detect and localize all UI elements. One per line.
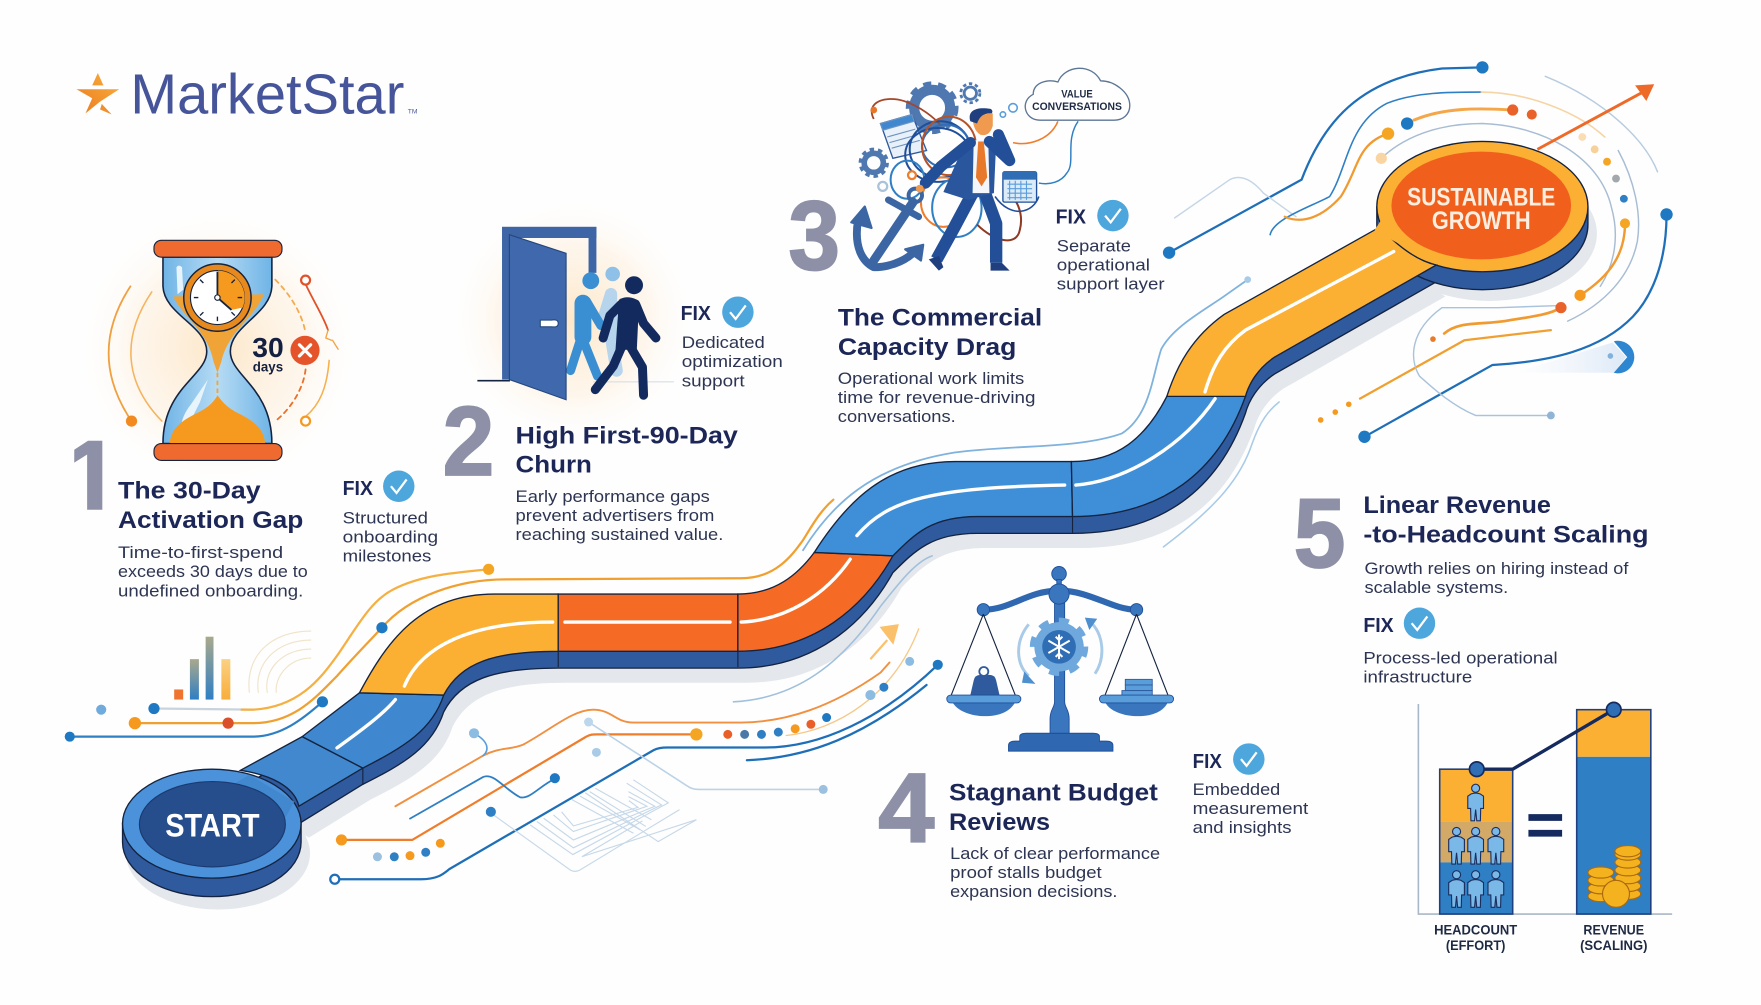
fix 5: FIX bbox=[1363, 614, 1394, 637]
heading 3 bbox=[838, 305, 1042, 361]
body 3: conversations. bbox=[838, 408, 956, 426]
orange segment 2 bbox=[738, 552, 893, 651]
body 1: exceeds 30 days due to bbox=[118, 563, 308, 581]
icon: man with anchor and tangled wires bbox=[851, 84, 1078, 271]
heading 1: Activation Gap bbox=[118, 507, 303, 534]
left pan bbox=[952, 702, 1015, 716]
fix 4: FIX bbox=[1193, 750, 1222, 773]
icon: door and people bbox=[477, 227, 674, 400]
hourglass highlights bbox=[176, 266, 208, 438]
label: 30 days: days bbox=[253, 360, 283, 375]
body 1: Time-to-first-spend bbox=[118, 544, 283, 562]
orange segment 1 bbox=[558, 594, 738, 651]
road: white lane lines bbox=[337, 252, 1394, 748]
heading 1: The 30-Day bbox=[118, 478, 261, 505]
road: disc shadows bbox=[126, 166, 1597, 910]
sustainable growth disc inner: GROWTH bbox=[1432, 208, 1531, 235]
body 1 bbox=[118, 544, 308, 600]
number 1: 1 bbox=[60, 415, 125, 547]
bar labels: (EFFORT) bbox=[1446, 937, 1505, 953]
body 2: Early performance gaps bbox=[516, 488, 710, 506]
chart axes bbox=[1418, 704, 1672, 914]
snowflake bbox=[1048, 634, 1070, 659]
heading 2: Churn bbox=[516, 452, 592, 479]
start disc inner bbox=[139, 782, 285, 867]
blue segment 3 bbox=[1071, 396, 1245, 517]
equals sign bbox=[1528, 814, 1562, 837]
scale beam bbox=[984, 591, 1137, 610]
network lines: bottom centre bbox=[335, 556, 938, 879]
fix 4: measurement bbox=[1193, 800, 1309, 818]
right pan bbox=[1105, 702, 1168, 716]
body 2 bbox=[516, 488, 723, 544]
man hair bbox=[970, 108, 992, 124]
logo wordmark: MarketStar bbox=[130, 62, 404, 125]
body 4: proof stalls budget bbox=[950, 864, 1102, 882]
man shoes bbox=[929, 256, 1010, 271]
body 4: Lack of clear performance bbox=[950, 845, 1160, 863]
man arms bbox=[925, 135, 1010, 183]
value conversations cloud: CONVERSATIONS bbox=[1032, 101, 1122, 113]
glow behind door bbox=[447, 194, 699, 446]
glow behind hourglass bbox=[74, 204, 362, 492]
man shirt and tie bbox=[973, 139, 989, 193]
chart: headcount vs revenue bbox=[1418, 702, 1672, 953]
dots around growth disc bbox=[1163, 61, 1673, 443]
fix 5 bbox=[1363, 607, 1558, 687]
body 2: reaching sustained value. bbox=[516, 526, 723, 544]
icon: balance scale with frozen gear bbox=[947, 567, 1174, 751]
blue person bbox=[571, 272, 601, 376]
body 1: undefined onboarding. bbox=[118, 582, 303, 600]
bottom cap bbox=[154, 444, 282, 460]
fix 2: FIX bbox=[681, 302, 711, 325]
heading 5: -to-Headcount Scaling bbox=[1363, 521, 1649, 548]
fix 1: onboarding bbox=[343, 528, 438, 546]
blue segment 2 bbox=[814, 462, 1073, 556]
document details bbox=[880, 115, 920, 148]
fix 4 bbox=[1193, 743, 1309, 837]
body 4 bbox=[950, 845, 1160, 901]
gears bbox=[860, 84, 980, 191]
heading 2: High First-90-Day bbox=[516, 423, 739, 450]
fix 1: milestones bbox=[343, 547, 431, 565]
network lines: left of road bbox=[65, 500, 833, 742]
fix 3 bbox=[1056, 200, 1165, 294]
logo: MarketStar bbox=[76, 62, 418, 125]
body 2: prevent advertisers from bbox=[516, 507, 714, 525]
icon: hourglass bbox=[154, 240, 282, 460]
heading 3: Capacity Drag bbox=[838, 334, 1016, 361]
fix 2 bbox=[681, 296, 783, 390]
start disc top bbox=[123, 769, 301, 878]
revenue bar bbox=[1577, 710, 1651, 914]
coins bbox=[1588, 846, 1641, 907]
fix 1: Structured bbox=[343, 509, 428, 527]
small bubbles bbox=[1000, 104, 1017, 117]
top cap bbox=[154, 240, 282, 257]
growth label: SUSTAINABLE bbox=[1407, 184, 1555, 211]
fix 2: support bbox=[682, 372, 745, 390]
mini bar chart bbox=[174, 631, 311, 700]
people icons bbox=[1449, 784, 1504, 907]
value conversations cloud bbox=[1025, 68, 1130, 120]
left weight bbox=[970, 675, 1000, 695]
calendar bbox=[1003, 172, 1037, 202]
document bbox=[880, 115, 927, 158]
rotation arrows bbox=[1019, 623, 1102, 676]
fix 2: optimization bbox=[682, 353, 783, 371]
gear bbox=[1033, 620, 1085, 673]
fix 1: FIX bbox=[343, 477, 373, 500]
heading 4 bbox=[949, 780, 1158, 836]
number 5: 5 bbox=[1294, 478, 1345, 588]
scale post bbox=[1050, 595, 1069, 733]
wires bbox=[891, 117, 1078, 240]
man torso bbox=[943, 143, 996, 200]
heading 1 bbox=[118, 478, 303, 534]
fix 3: Separate bbox=[1057, 238, 1131, 256]
arrow: small orange up bbox=[870, 625, 897, 659]
man head bbox=[973, 113, 993, 135]
right pan rim bbox=[1099, 695, 1174, 703]
fix 1 bbox=[343, 470, 438, 565]
network lines: along road top and right bbox=[803, 67, 1667, 550]
trend dots bbox=[1469, 702, 1621, 776]
fix 3: operational bbox=[1057, 257, 1150, 275]
bar labels: HEADCOUNT bbox=[1434, 921, 1518, 937]
start label: START bbox=[165, 808, 260, 844]
icon: red cross bbox=[290, 336, 320, 365]
icon: pacman marker bbox=[1514, 341, 1634, 373]
icon: logo star bbox=[76, 73, 119, 115]
trademark: TM bbox=[408, 108, 418, 115]
door handle bbox=[540, 320, 558, 327]
sustainable growth disc inner bbox=[1391, 152, 1571, 259]
start neck bbox=[240, 737, 363, 806]
trend line bbox=[1477, 710, 1614, 769]
body 3 bbox=[838, 370, 1035, 426]
dots: bottom centre bbox=[330, 657, 943, 884]
heading 5: Linear Revenue bbox=[1363, 492, 1551, 519]
bar labels bbox=[1434, 921, 1647, 953]
hourglass glass bbox=[163, 257, 272, 444]
road: start segments bbox=[123, 141, 1588, 878]
body 5: scalable systems. bbox=[1364, 579, 1508, 597]
heading 4: Reviews bbox=[949, 809, 1050, 836]
right stack bbox=[1122, 679, 1152, 696]
body 5: Growth relies on hiring instead of bbox=[1364, 560, 1629, 578]
fix 4: Embedded bbox=[1193, 781, 1280, 799]
number 2: 2 bbox=[443, 386, 494, 496]
sand drip bbox=[216, 373, 218, 395]
body 3: Operational work limits bbox=[838, 370, 1024, 388]
yellow segment 1 bbox=[359, 594, 558, 695]
door floor line bbox=[593, 381, 674, 383]
bar labels: REVENUE bbox=[1583, 921, 1644, 937]
road: seam lines on side wall bbox=[363, 517, 1073, 785]
clock bbox=[184, 264, 251, 331]
man hand on anchor bbox=[916, 185, 924, 193]
scale hub and finial bbox=[977, 567, 1143, 616]
anchor bbox=[851, 189, 923, 267]
door panel bbox=[509, 235, 566, 400]
arrow: growth bbox=[1537, 84, 1654, 149]
man legs bbox=[937, 193, 996, 263]
fix 5: Process-led operational bbox=[1363, 650, 1558, 668]
hourglass orbit arcs bbox=[109, 276, 338, 427]
hourglass bottom sand bbox=[170, 395, 265, 444]
fix 3: FIX bbox=[1056, 205, 1086, 228]
red wire with orange dot bbox=[870, 99, 941, 126]
headcount bar bbox=[1440, 769, 1513, 914]
number 4: 4 bbox=[878, 753, 934, 863]
blue segment 1 bbox=[302, 693, 444, 768]
fix 2: Dedicated bbox=[682, 334, 765, 352]
heading 4: Stagnant Budget bbox=[949, 780, 1158, 807]
pale person bbox=[603, 267, 620, 371]
patch: neck joins to discs bbox=[230, 202, 1449, 825]
door frame bbox=[502, 227, 596, 380]
scale base bbox=[1009, 733, 1113, 751]
body 3: time for revenue-driving bbox=[838, 389, 1035, 407]
number 3: 3 bbox=[788, 180, 840, 290]
heading 3: The Commercial bbox=[838, 305, 1042, 332]
weight ring bbox=[979, 667, 988, 676]
road: shadow bbox=[251, 258, 1445, 838]
body 5 bbox=[1364, 560, 1629, 597]
heading 5 bbox=[1363, 492, 1649, 548]
scale strings bbox=[951, 614, 1168, 695]
yellow segment 2 bbox=[1167, 227, 1436, 396]
maze lines bbox=[491, 780, 696, 871]
hourglass top sand bbox=[173, 294, 264, 373]
growth disc outer bbox=[1377, 141, 1588, 272]
heading 2 bbox=[516, 423, 739, 479]
value conversations cloud: VALUE bbox=[1061, 89, 1093, 101]
fix 5: infrastructure bbox=[1363, 669, 1472, 687]
body 4: expansion decisions. bbox=[950, 883, 1117, 901]
bar labels: (SCALING) bbox=[1580, 937, 1647, 953]
fix 3: support layer bbox=[1057, 276, 1165, 294]
left pan rim bbox=[947, 695, 1021, 703]
label: 30 days: 30 bbox=[252, 332, 284, 363]
fix 4: and insights bbox=[1193, 819, 1291, 837]
road: side wall bbox=[123, 207, 1588, 897]
dark person bbox=[595, 276, 656, 395]
